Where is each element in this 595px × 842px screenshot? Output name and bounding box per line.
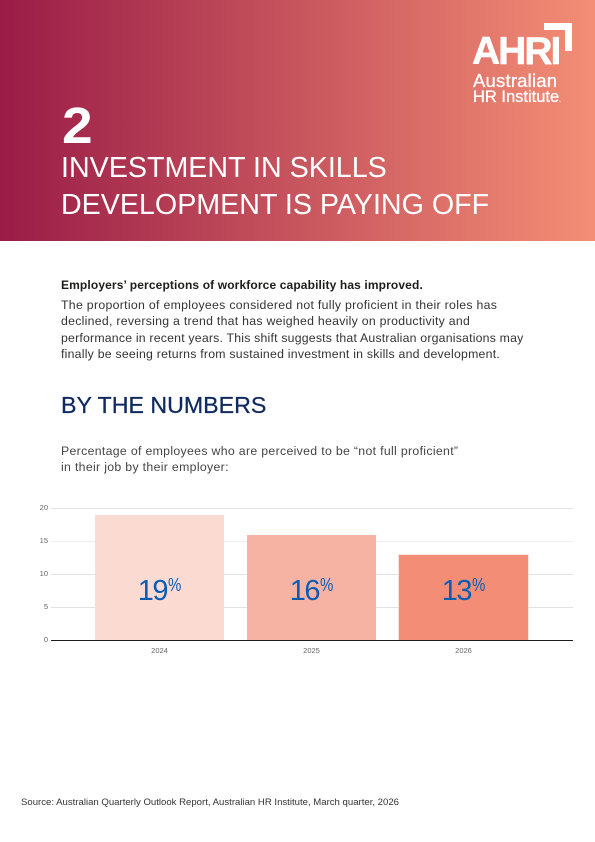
intro paragraph: finally be seeing returns from sustained investment in skills and development. — [61, 347, 500, 361]
bar: 2025 — [247, 535, 376, 640]
label: 2025: 2025 — [303, 646, 320, 655]
y axis labels: 20 — [40, 503, 48, 512]
label: 2026: 2026 — [455, 646, 472, 655]
value: 16%: 16 — [290, 575, 319, 607]
chart description: in their job by their employer: — [61, 460, 229, 474]
logo: AHRI — [472, 23, 572, 106]
logo wordmark: AHRI — [472, 30, 559, 73]
bar chart — [40, 503, 573, 655]
baseline — [51, 640, 573, 641]
intro heading: Employers’ perceptions of workforce capability has improved. — [61, 278, 423, 292]
y axis labels: 10 — [40, 569, 48, 578]
value: 19% — [138, 575, 181, 607]
chart description: Percentage of employees who are perceived to be “not full proficient” — [61, 444, 458, 458]
label: 2024: 2024 — [151, 646, 168, 655]
value: 16% — [290, 575, 333, 607]
y axis labels — [40, 503, 48, 644]
y axis labels: 15 — [40, 536, 48, 545]
bar: 2026 — [399, 555, 528, 640]
value: 13% — [442, 575, 485, 607]
by the numbers heading: BY THE NUMBERS — [61, 392, 266, 418]
logo name line 2: HR Institute. — [473, 88, 561, 106]
header banner — [0, 0, 595, 241]
intro paragraph: performance in recent years. This shift suggests that Australian organisations may — [61, 331, 524, 345]
y axis labels: 5 — [44, 602, 48, 611]
section title: DEVELOPMENT IS PAYING OFF — [61, 188, 489, 220]
logo bracket — [544, 23, 572, 51]
intro paragraph: declined, reversing a trend that has weighed heavily on productivity and — [61, 314, 470, 328]
section number: 2 — [62, 97, 93, 154]
section title — [61, 152, 489, 220]
section title: INVESTMENT IN SKILLS — [61, 152, 387, 184]
value: 19%: 19 — [138, 575, 167, 607]
value: 13%: % — [472, 575, 485, 596]
value: 13%: 13 — [442, 575, 471, 607]
value: 19%: % — [168, 575, 181, 596]
logo name line 1: Australian — [473, 70, 557, 90]
bar: 2024 — [95, 515, 224, 640]
intro paragraph: The proportion of employees considered not fully proficient in their roles has — [61, 298, 497, 312]
source note: Source: Australian Quarterly Outlook Report, Australian HR Institute, March quarter, 2026 — [21, 797, 399, 808]
chart description — [61, 444, 458, 474]
value: 16%: % — [320, 575, 333, 596]
intro paragraph — [61, 298, 524, 361]
y axis labels: 0 — [44, 635, 48, 644]
